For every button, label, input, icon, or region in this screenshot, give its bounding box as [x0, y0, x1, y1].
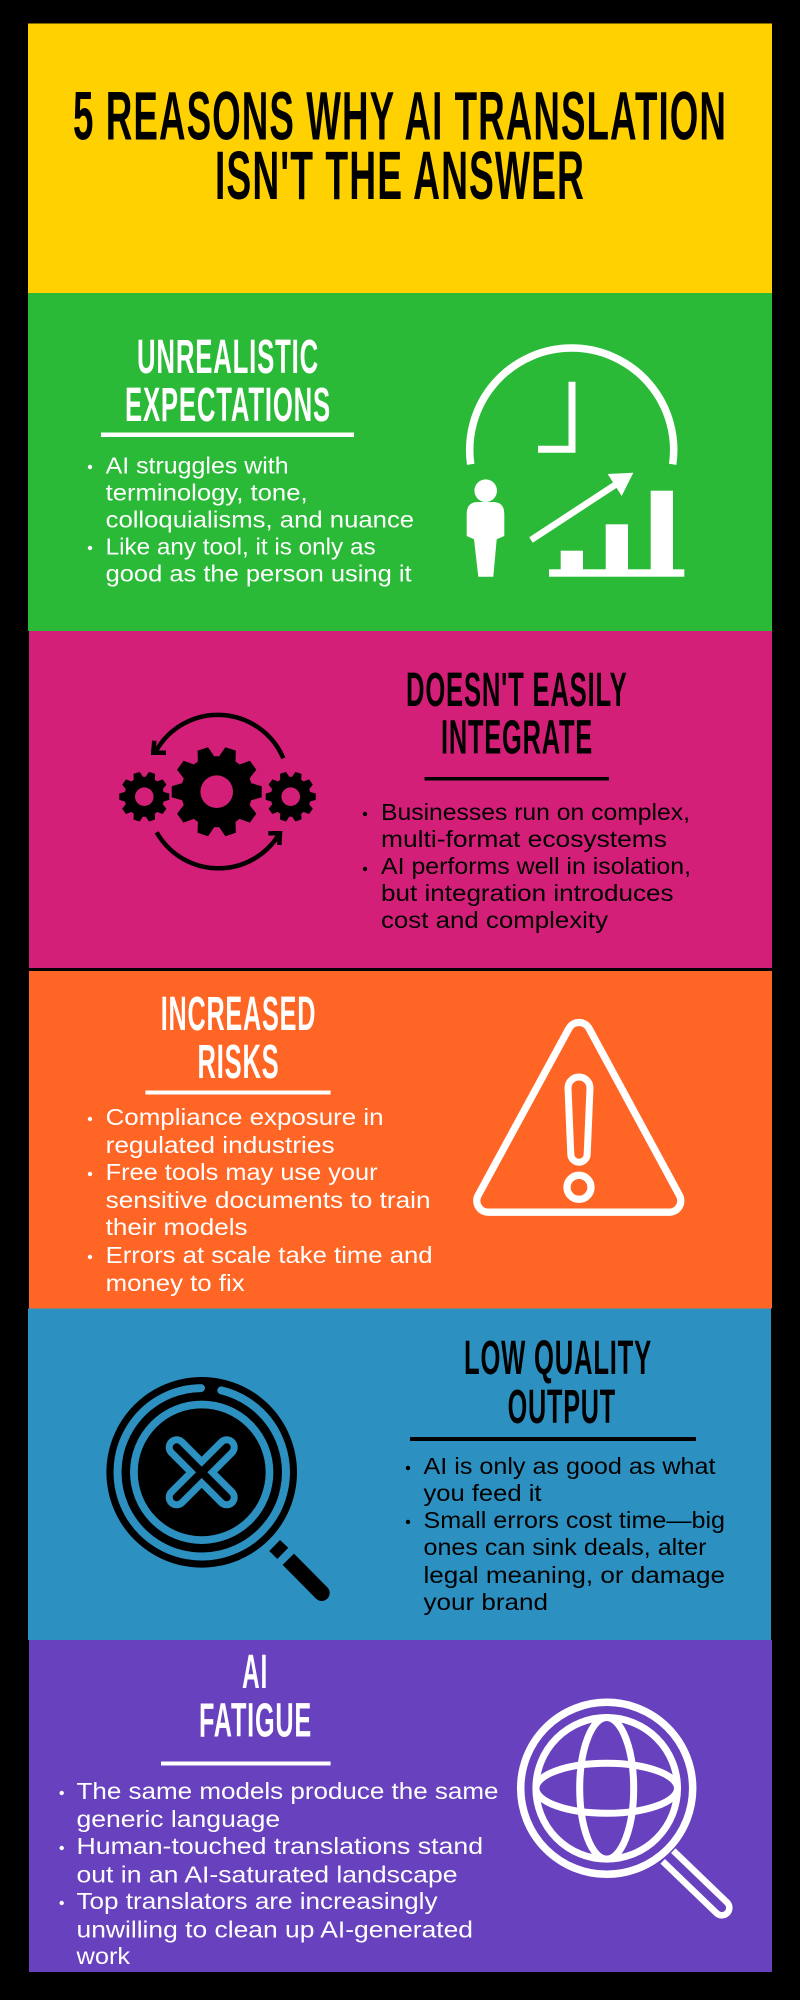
icon: magnifying glass with globe: [521, 1702, 729, 1915]
heading: unrealistic expectations: UNREALISTIC: [137, 330, 319, 384]
heading: unrealistic expectations: [125, 330, 331, 432]
heading: unrealistic expectations: EXPECTATIONS: [125, 378, 331, 432]
heading underline: [424, 777, 609, 780]
bullet list: AI fatigue: Top translators are increasingly: [76, 1888, 438, 1914]
heading: low quality output: [464, 1331, 652, 1434]
bullet list: increased risks: sensitive documents to train: [106, 1187, 431, 1213]
heading: AI fatigue: [199, 1645, 312, 1748]
heading: low quality output: OUTPUT: [508, 1380, 616, 1434]
heading underline: [161, 1762, 331, 1766]
bullet list: low quality output: ones can sink deals, alter: [424, 1534, 707, 1560]
panel: AI fatigue: [29, 1640, 772, 1972]
bullet list: unrealistic expectations: colloquialisms, and nuance: [106, 506, 414, 532]
bullet list: increased risks: their models: [106, 1214, 248, 1240]
bullet list: low quality output: [406, 1453, 725, 1615]
bullet list: increased risks: money to fix: [106, 1270, 245, 1296]
bullet list: increased risks: Free tools may use your: [106, 1159, 378, 1185]
bullet list: doesn't easily integrate: but integration introduces: [381, 880, 674, 906]
panel: unrealistic expectations: [28, 293, 772, 631]
divider line between panels: [29, 968, 772, 971]
bullet list: increased risks: regulated industries: [106, 1132, 335, 1158]
heading: increased risks: [161, 987, 316, 1089]
heading: increased risks: RISKS: [198, 1035, 280, 1089]
bullet list: doesn't easily integrate: AI performs well in isolation,: [381, 853, 691, 879]
bullet list: increased risks: Compliance exposure in: [106, 1104, 384, 1130]
bullet list: doesn't easily integrate: multi-format ecosystems: [381, 826, 667, 852]
heading underline: [145, 1090, 331, 1094]
bullet list: unrealistic expectations: Like any tool, it is only as: [106, 534, 376, 560]
bullet list: doesn't easily integrate: [363, 799, 691, 933]
heading: doesn't easily integrate: [406, 663, 628, 764]
bullet list: increased risks: Errors at scale take time and: [106, 1242, 433, 1268]
bullet list: unrealistic expectations: terminology, tone,: [106, 480, 308, 506]
bullet list: AI fatigue: generic language: [76, 1806, 280, 1832]
bullet list: unrealistic expectations: good as the person using it: [106, 560, 412, 586]
panel: low quality output: [28, 1308, 771, 1640]
bullet list: low quality output: your brand: [424, 1589, 548, 1615]
icon: warning triangle: [477, 1022, 681, 1212]
bullet list: increased risks: [88, 1104, 433, 1296]
heading underline: [410, 1437, 696, 1441]
heading: increased risks: INCREASED: [161, 987, 316, 1041]
bullet list: unrealistic expectations: [88, 452, 414, 586]
heading: doesn't easily integrate: INTEGRATE: [441, 710, 593, 764]
bullet list: AI fatigue: The same models produce the same: [76, 1778, 498, 1804]
bullet list: low quality output: Small errors cost time—big: [424, 1507, 725, 1533]
title: [73, 78, 727, 214]
bullet list: AI fatigue: [60, 1778, 498, 1969]
bullet list: low quality output: legal meaning, or damage: [424, 1562, 725, 1588]
panel: title banner: [28, 24, 772, 293]
bullet list: low quality output: AI is only as good as what: [424, 1453, 716, 1479]
bullet list: doesn't easily integrate: Businesses run on complex,: [381, 799, 690, 825]
bullet list: AI fatigue: Human-touched translations stand: [76, 1833, 483, 1859]
bullet list: AI fatigue: unwilling to clean up AI-generated: [76, 1916, 473, 1942]
heading underline: [101, 432, 354, 437]
bullet list: AI fatigue: work: [75, 1943, 131, 1969]
icon: clock, person and rising chart: [467, 348, 684, 577]
panel: increased risks: [29, 971, 772, 1308]
icon: gears with circular arrows: [119, 715, 316, 868]
icon: magnifying glass with X: [106, 1377, 330, 1601]
heading: AI fatigue: FATIGUE: [199, 1694, 312, 1748]
bullet list: unrealistic expectations: AI struggles with: [106, 452, 289, 478]
panel: doesn't easily integrate: [29, 631, 772, 968]
bullet list: doesn't easily integrate: cost and complexity: [381, 907, 609, 933]
bullet list: low quality output: you feed it: [424, 1480, 542, 1506]
bullet list: AI fatigue: out in an AI-saturated landscape: [76, 1862, 457, 1888]
heading: AI fatigue: AI: [242, 1645, 268, 1699]
